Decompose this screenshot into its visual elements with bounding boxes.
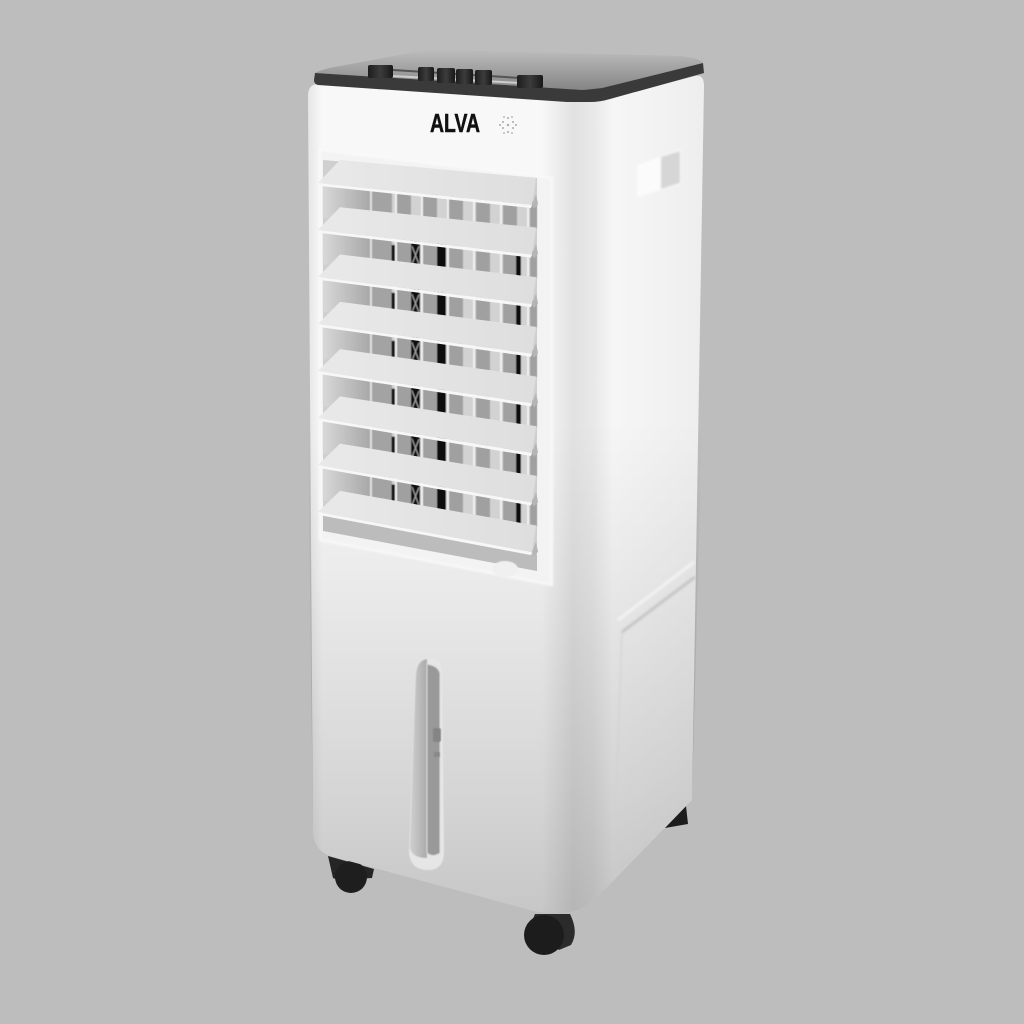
cooler body — [308, 76, 704, 913]
water level window — [409, 658, 444, 870]
rear foot — [665, 806, 688, 828]
louver adjuster tab — [492, 561, 518, 577]
lower body shading — [308, 420, 702, 913]
bottom vent recess — [323, 515, 537, 571]
side seam detail — [614, 562, 695, 850]
brand logo: ALVA — [430, 108, 480, 138]
left caster wheel — [328, 856, 374, 893]
speaker dots — [499, 116, 517, 134]
louver frame — [320, 150, 552, 585]
air vent gaps — [323, 180, 537, 530]
louver opening — [323, 160, 537, 570]
right caster wheel — [524, 914, 575, 955]
control knobs — [368, 65, 543, 88]
lid dark band — [314, 63, 704, 102]
side carry handle — [637, 149, 681, 197]
louver blades — [318, 160, 538, 557]
top lid surface — [315, 50, 703, 90]
